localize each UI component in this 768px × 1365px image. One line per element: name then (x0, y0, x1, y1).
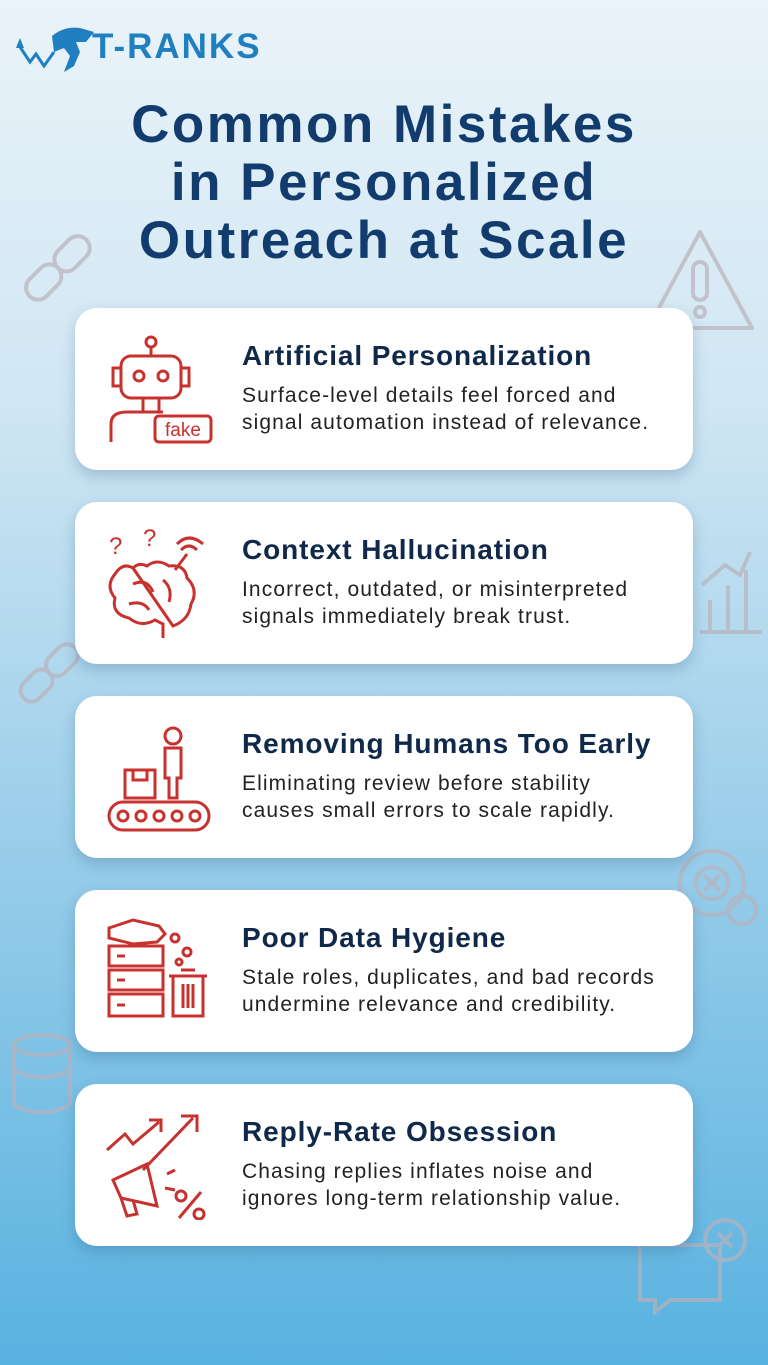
title: Outreach at Scale (139, 211, 629, 270)
icon: robot fake (110, 336, 212, 444)
panel: reply-rate obsession (75, 1084, 693, 1246)
icon: brain: ? (109, 533, 122, 560)
panel: context hallucination: signals immediately break trust. (242, 605, 571, 628)
panel: reply-rate obsession: Chasing replies inflates noise and (242, 1160, 593, 1183)
icon: megaphone arrows (106, 1114, 206, 1220)
panel: poor data hygiene (75, 890, 693, 1052)
panel: reply-rate obsession: Reply-Rate Obsession (242, 1116, 557, 1147)
title: in Personalized (171, 153, 597, 212)
panel: reply-rate obsession: ignores long-term relationship value. (242, 1187, 621, 1210)
panel: artificial personalization: signal automation instead of relevance. (242, 411, 649, 434)
panel: removing humans too early: Eliminating review before stability (242, 772, 591, 795)
panel: poor data hygiene: undermine relevance and credibility. (242, 993, 616, 1016)
panel: removing humans too early: causes small errors to scale rapidly. (242, 799, 615, 822)
panel: context hallucination: Incorrect, outdated, or misinterpreted (242, 578, 628, 601)
panel: context hallucination: Context Hallucination (242, 534, 549, 565)
panel: artificial personalization: Artificial Personalization (242, 340, 592, 371)
panel: artificial personalization: Surface-level details feel forced and (242, 384, 617, 407)
icon: conveyor (108, 726, 210, 832)
title: Common Mistakes (131, 95, 637, 154)
panel: removing humans too early (75, 696, 693, 858)
panel: context hallucination (75, 502, 693, 664)
icon: servers trash (108, 918, 207, 1018)
title (131, 95, 637, 270)
panel: poor data hygiene: Stale roles, duplicates, and bad records (242, 966, 655, 989)
panel: removing humans too early: Removing Humans Too Early (242, 728, 651, 759)
icon: brain (108, 528, 204, 638)
logo: T-RANKS (92, 27, 262, 66)
icon: robot fake: fake (165, 420, 201, 441)
logo (16, 27, 262, 72)
panel: artificial personalization (75, 308, 693, 470)
panel: poor data hygiene: Poor Data Hygiene (242, 922, 506, 953)
